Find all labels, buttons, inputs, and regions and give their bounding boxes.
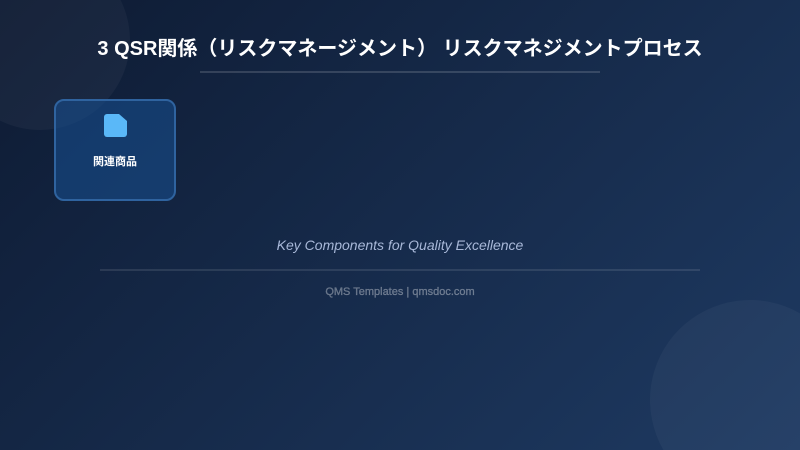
- title: 3 QSR関係（リスクマネージメント） リスクマネジメントプロセス: [97, 38, 703, 60]
- icon: document: [104, 114, 127, 137]
- decorative circle: bottom right: [650, 300, 800, 450]
- card: related products: [54, 99, 176, 201]
- card label: 関連商品: [93, 156, 137, 168]
- decorative circle: top left: [0, 0, 130, 130]
- tagline: Key Components for Quality Excellence: [277, 237, 523, 253]
- footer text: QMS Templates | qmsdoc.com: [325, 286, 475, 298]
